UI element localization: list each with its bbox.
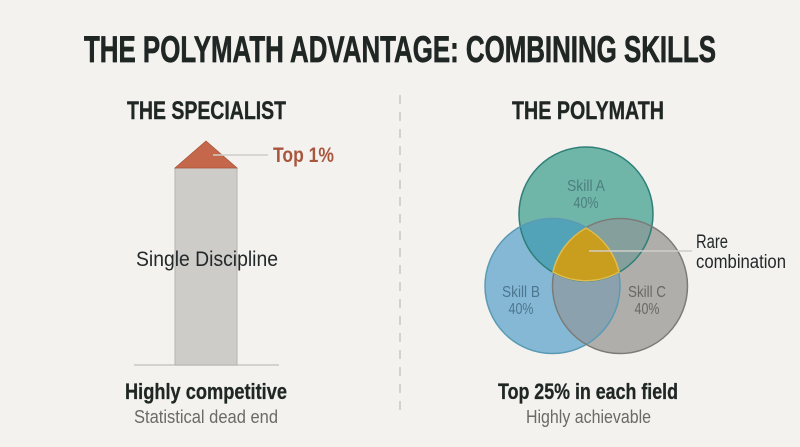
value: skill b: 40% bbox=[508, 301, 534, 318]
venn diagram bbox=[485, 147, 692, 354]
panel: the specialist bbox=[125, 97, 334, 427]
label: single discipline: Single Discipline bbox=[136, 248, 278, 271]
value: skill a: 40% bbox=[574, 195, 598, 212]
heading: the polymath: THE POLYMATH bbox=[512, 97, 664, 125]
leader line: rare combination bbox=[589, 250, 692, 252]
leader line: top 1% bbox=[213, 154, 268, 156]
label: combination: combination bbox=[696, 252, 786, 273]
circle: skill b bbox=[485, 218, 620, 354]
center overlap bbox=[553, 228, 619, 281]
bar: single discipline bbox=[175, 168, 237, 365]
circle: skill a bbox=[519, 147, 653, 281]
label: top 1%: Top 1% bbox=[273, 144, 334, 167]
label: skill b: Skill B bbox=[502, 284, 540, 301]
label: skill a: Skill A bbox=[567, 178, 605, 195]
caption: highly achievable: Highly achievable bbox=[526, 407, 651, 427]
circle: skill c bbox=[552, 218, 688, 354]
peak triangle bbox=[175, 141, 237, 168]
caption: statistical dead end: Statistical dead end bbox=[134, 407, 278, 427]
value: skill c: 40% bbox=[634, 301, 660, 318]
caption: highly competitive: Highly competitive bbox=[125, 379, 287, 404]
caption: top 25% in each field: Top 25% in each field bbox=[498, 379, 678, 404]
label: rare: Rare bbox=[696, 232, 728, 253]
heading: the specialist: THE SPECIALIST bbox=[127, 97, 286, 125]
panel: the polymath bbox=[485, 97, 786, 427]
label: skill c: Skill C bbox=[628, 284, 666, 301]
